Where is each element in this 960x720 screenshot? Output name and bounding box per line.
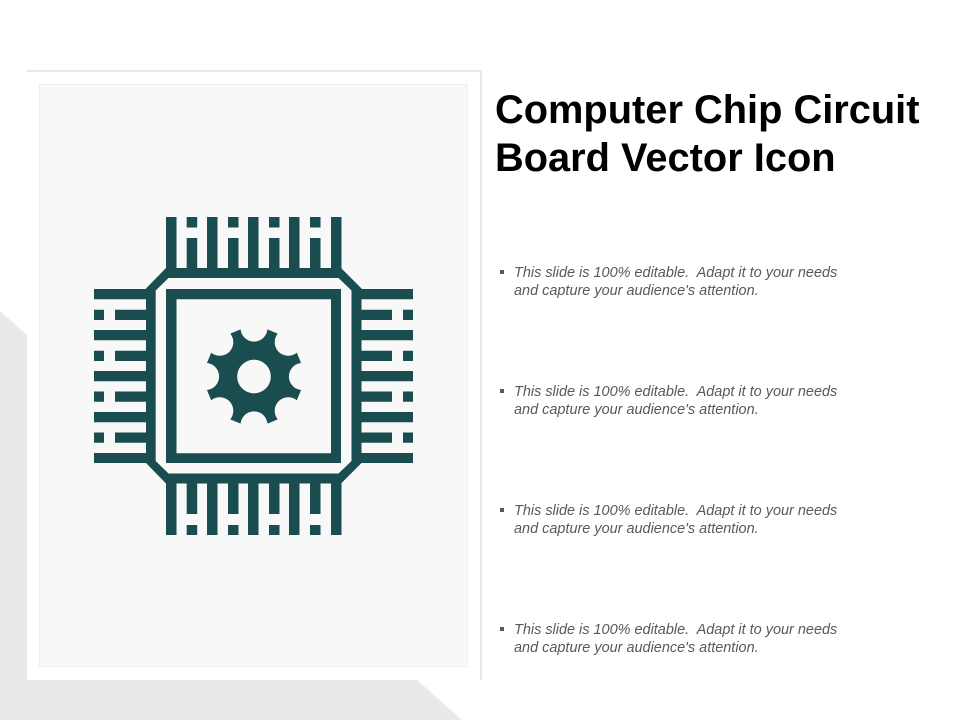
text block 1: This slide is 100% editable. Adapt it to your needs xyxy=(514,264,837,280)
text block 3: This slide is 100% editable. Adapt it to your needs xyxy=(514,502,837,518)
bottom pins xyxy=(166,483,342,535)
title: Board Vector Icon xyxy=(495,136,836,180)
text block 2 xyxy=(500,384,837,418)
text block 3 xyxy=(500,502,837,536)
chip outer octagon xyxy=(146,268,362,484)
icon: computer chip xyxy=(94,217,413,535)
text block 2: and capture your audience's attention. xyxy=(514,402,759,418)
title: Computer Chip Circuit xyxy=(495,88,920,132)
text block 2: This slide is 100% editable. Adapt it to your needs xyxy=(514,384,837,400)
text block 1: and capture your audience's attention. xyxy=(514,282,759,298)
right pins xyxy=(361,289,413,463)
left pins xyxy=(94,289,146,463)
text block 4: and capture your audience's attention. xyxy=(514,640,759,656)
top pins xyxy=(166,217,342,269)
text block 4: This slide is 100% editable. Adapt it to your needs xyxy=(514,622,837,638)
panel: inner card xyxy=(39,84,468,667)
text block 3: and capture your audience's attention. xyxy=(514,520,759,536)
text block 1 xyxy=(500,264,837,298)
title xyxy=(495,88,920,180)
chip inner square xyxy=(166,289,341,463)
gear xyxy=(207,329,301,424)
text block 4 xyxy=(500,622,837,656)
panel: outer card xyxy=(27,70,482,680)
